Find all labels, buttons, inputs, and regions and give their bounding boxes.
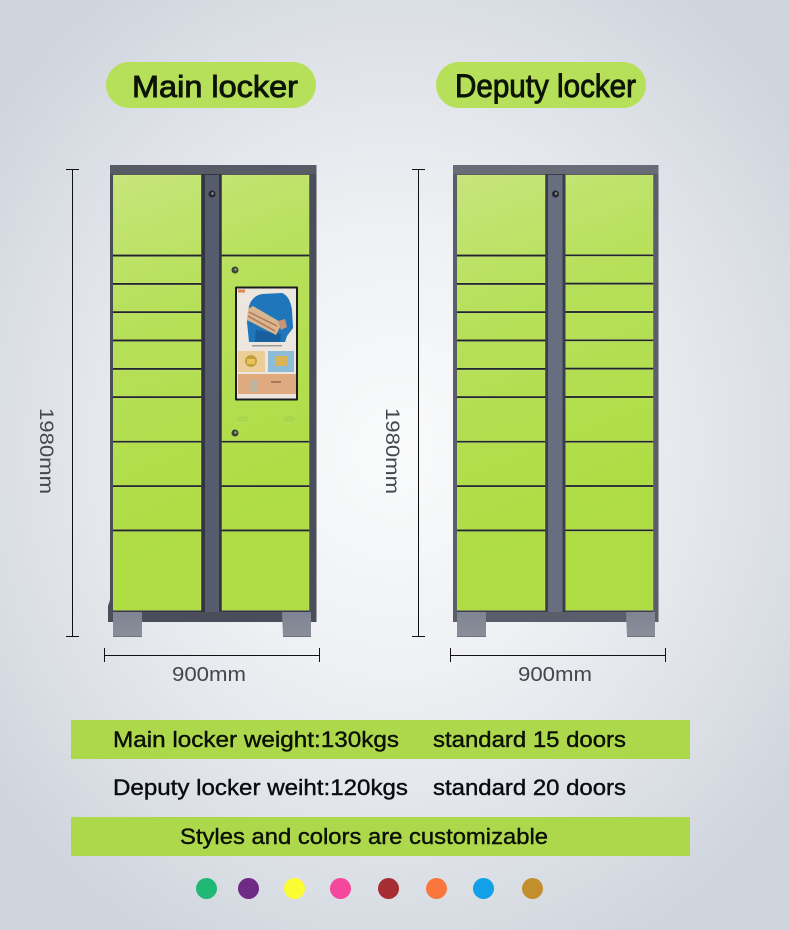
tile: left xyxy=(238,351,265,372)
customization banner xyxy=(71,817,690,856)
dimension: main height: 1980mm xyxy=(35,408,57,494)
heading: deputy locker: Deputy locker xyxy=(455,68,636,104)
frame xyxy=(453,165,658,622)
dimension: deputy width xyxy=(450,648,666,686)
icon: locks xyxy=(208,190,238,436)
spec row: main locker: standard 15 doors xyxy=(433,727,626,752)
right column doors xyxy=(566,175,653,610)
spec row: deputy locker: Deputy locker weiht:120kgs xyxy=(113,775,408,800)
heading: main locker: Main locker xyxy=(132,69,298,104)
dimension: deputy width: 900mm xyxy=(518,664,592,686)
dimension: main width: 900mm xyxy=(172,664,246,686)
tile: right xyxy=(268,351,294,372)
icon: lock xyxy=(552,190,559,198)
right column doors xyxy=(222,175,309,610)
frame xyxy=(108,165,316,622)
tile: bottom xyxy=(238,374,296,394)
main locker cabinet xyxy=(108,165,316,637)
courier in blue jacket xyxy=(247,293,293,342)
touch screen xyxy=(235,286,298,400)
speakers xyxy=(236,416,296,422)
deputy locker cabinet xyxy=(453,165,658,637)
spec row: deputy locker xyxy=(113,775,626,800)
customization banner: Styles and colors are customizable xyxy=(180,824,548,849)
heading: deputy locker xyxy=(436,62,646,108)
dimension: deputy height: 1980mm xyxy=(381,408,403,494)
dimension: main height xyxy=(35,169,79,637)
spec row: main locker: Main locker weight:130kgs xyxy=(113,727,399,752)
dimension: deputy height xyxy=(381,169,425,637)
colour swatches xyxy=(196,878,543,899)
heading: main locker xyxy=(106,62,316,108)
spec row: deputy locker: standard 20 doors xyxy=(433,775,626,800)
spec row: main locker xyxy=(71,720,690,759)
dimension: main width xyxy=(104,648,320,686)
